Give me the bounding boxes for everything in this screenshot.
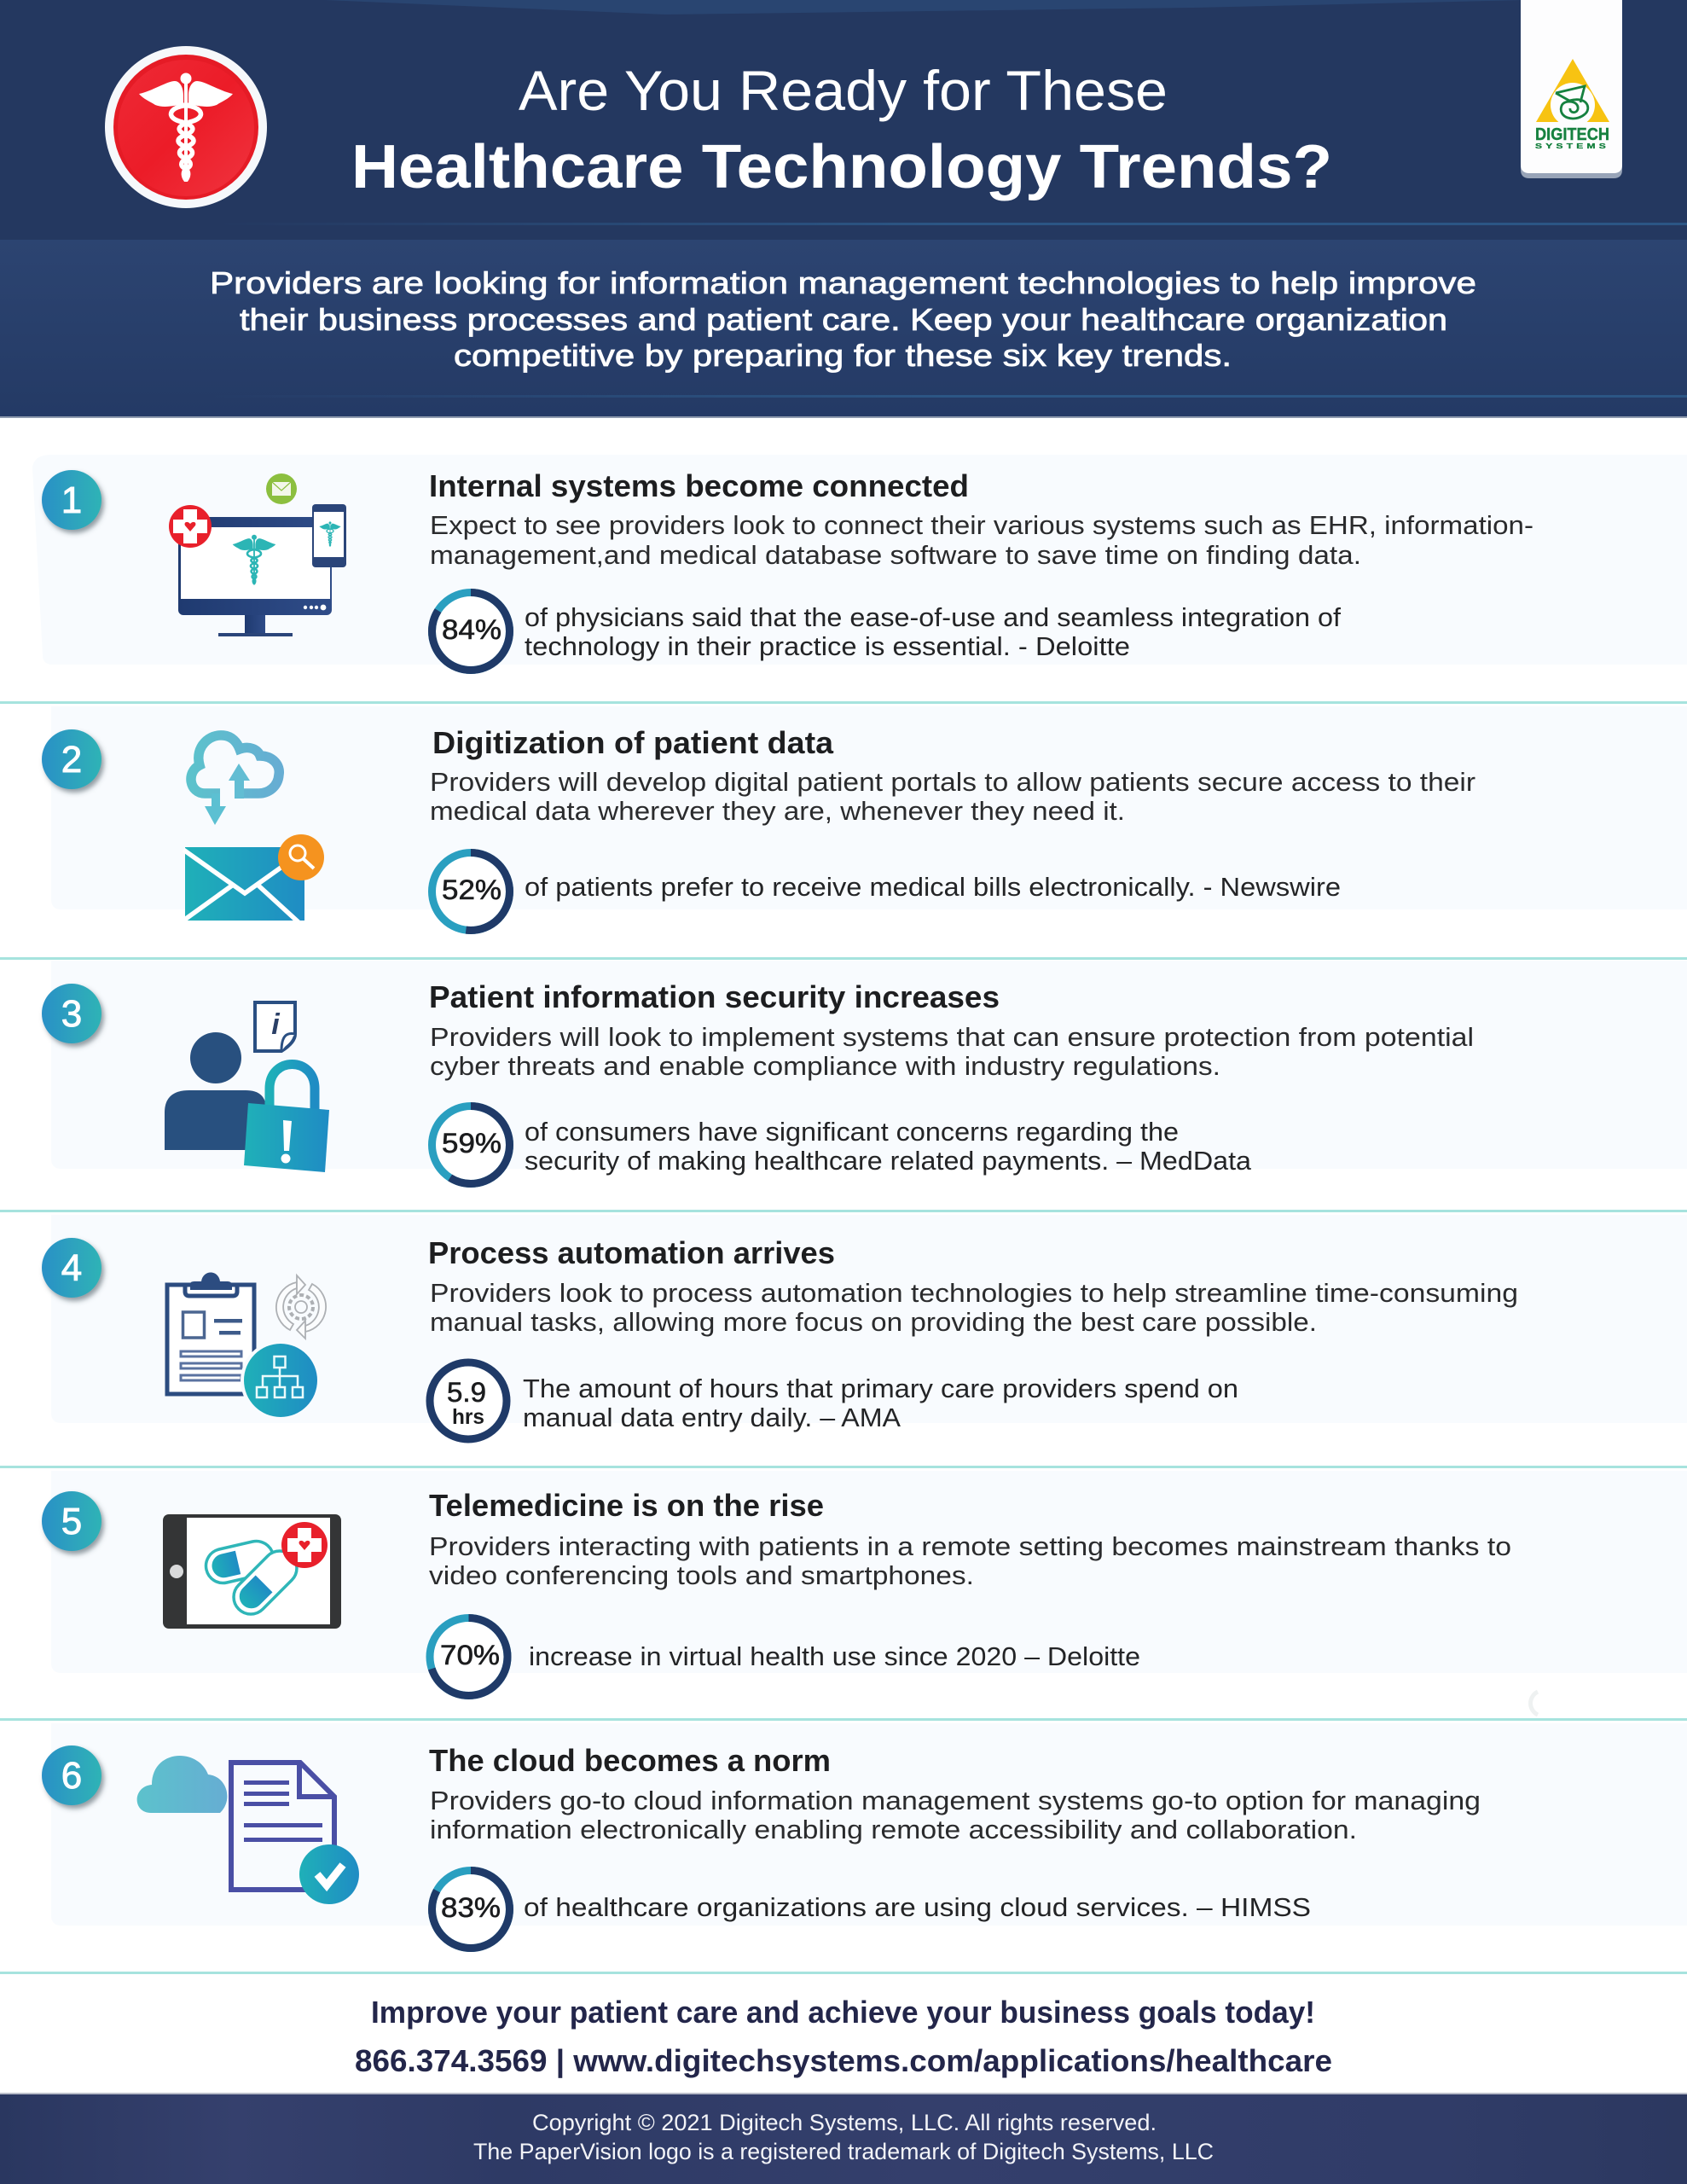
heading: Process automation arrives xyxy=(428,1235,835,1270)
heading: The cloud becomes a norm xyxy=(429,1743,831,1778)
heading: Digitization of patient data xyxy=(432,725,834,760)
panel background xyxy=(32,455,1687,665)
body text xyxy=(430,1278,1518,1337)
icon: monitor with phone xyxy=(169,473,346,636)
number badge 4: 4 xyxy=(61,1247,82,1289)
body text xyxy=(430,1786,1481,1844)
body text: Providers look to process automation technologies to help streamline time-consuming xyxy=(430,1278,1518,1308)
stat text: increase in virtual health use since 2020 – Deloitte xyxy=(529,1641,1140,1671)
body text xyxy=(429,1531,1511,1590)
body text: management,and medical database software to save time on finding data. xyxy=(430,540,1361,570)
header banner xyxy=(0,0,1687,418)
number badge 5 xyxy=(42,1491,101,1551)
ring stat 5.9 hrs xyxy=(430,1362,507,1439)
ring stat 59%: 59% xyxy=(442,1128,501,1159)
copyright text: The PaperVision logo is a registered trademark of Digitech Systems, LLC xyxy=(473,2139,1214,2164)
body text: information electronically enabling remote accessibility and collaboration. xyxy=(430,1815,1357,1844)
stat text: security of making healthcare related payments. – MedData xyxy=(525,1146,1252,1176)
copyright text: Copyright © 2021 Digitech Systems, LLC. All rights reserved. xyxy=(532,2110,1157,2135)
section 1: internal systems xyxy=(32,455,1687,671)
stat text: manual data entry daily. – AMA xyxy=(523,1403,901,1432)
call to action: 866.374.3569 | www.digitechsystems.com/applications/healthcare xyxy=(355,2043,1332,2079)
stat text: of healthcare organizations are using cloud services. – HIMSS xyxy=(524,1892,1311,1922)
body text xyxy=(430,1022,1474,1081)
section 3: security xyxy=(42,961,1687,1184)
ring stat 52%: 52% xyxy=(442,874,501,905)
call to action: Improve your patient care and achieve your business goals today! xyxy=(371,1995,1315,2030)
icon: cloud and document check xyxy=(137,1756,359,1904)
logo: Digitech Systems tab xyxy=(1521,0,1622,178)
body text: Providers go-to cloud information management systems go-to option for managing xyxy=(430,1786,1481,1815)
section 6: cloud xyxy=(42,1723,1687,1949)
ring stat 59% xyxy=(432,1106,510,1184)
body text: manual tasks, allowing more focus on providing the best care possible. xyxy=(430,1307,1317,1337)
ring stat 83% xyxy=(432,1870,510,1949)
ring stat 52% xyxy=(432,853,510,930)
intro text xyxy=(210,265,1476,373)
number badge 6: 6 xyxy=(61,1755,82,1797)
ring stat 70%: 70% xyxy=(440,1640,500,1670)
logo: Digitech Systems tab: SYSTEMS xyxy=(1535,142,1609,150)
footer xyxy=(0,2093,1687,2184)
intro text: competitive by preparing for these six key trends. xyxy=(454,338,1232,373)
icon: person, note and padlock xyxy=(165,1002,329,1172)
ring stat 5.9 hrs: 5.9 xyxy=(447,1377,486,1408)
body text: medical data wherever they are, whenever they need it. xyxy=(430,796,1125,826)
number badge 2: 2 xyxy=(61,739,82,781)
body text: cyber threats and enable compliance with industry regulations. xyxy=(430,1051,1220,1081)
body text: Expect to see providers look to connect their various systems such as EHR, information- xyxy=(430,510,1533,540)
body text: video conferencing tools and smartphones. xyxy=(429,1560,974,1590)
number badge 3 xyxy=(42,984,101,1043)
title line 1: Are You Ready for These xyxy=(519,59,1168,122)
heading: Telemedicine is on the rise xyxy=(429,1488,824,1523)
body text: Providers will develop digital patient portals to allow patients secure access to their xyxy=(430,767,1475,797)
body text: Providers will look to implement systems that can ensure protection from potential xyxy=(430,1022,1474,1052)
icon: clipboard, gear and org chart xyxy=(167,1273,326,1420)
stat text: technology in their practice is essential. - Deloitte xyxy=(525,631,1130,661)
number badge 6 xyxy=(42,1745,101,1805)
number badge 1 xyxy=(42,470,101,530)
ring stat 5.9 hrs: hrs xyxy=(452,1405,484,1429)
section 4: automation xyxy=(42,1215,1687,1439)
number badge 1: 1 xyxy=(61,479,82,521)
section 2: digitization xyxy=(42,706,1687,930)
panel background xyxy=(51,1471,1687,1673)
body text xyxy=(430,510,1533,570)
intro text: Providers are looking for information management technologies to help improve xyxy=(210,265,1476,300)
call to action xyxy=(355,1995,1332,2079)
panel background xyxy=(51,1215,1687,1423)
logo: Digitech Systems tab: DIGITECH xyxy=(1535,125,1609,144)
stat text: of patients prefer to receive medical bills electronically. - Newswire xyxy=(525,872,1341,902)
stat text: of physicians said that the ease-of-use and seamless integration of xyxy=(525,602,1341,632)
number badge 3: 3 xyxy=(61,993,82,1035)
ring stat 84% xyxy=(432,592,510,671)
intro text: their business processes and patient care. Keep your healthcare organization xyxy=(240,302,1447,337)
body text: Providers interacting with patients in a remote setting becomes mainstream thanks to xyxy=(429,1531,1511,1561)
panel background xyxy=(51,1723,1687,1926)
icon: cloud transfer and envelope xyxy=(183,735,324,922)
icon: caduceus badge xyxy=(105,46,267,208)
stat text xyxy=(523,1374,1238,1432)
panel background xyxy=(51,706,1687,909)
icon: tablet with capsules xyxy=(163,1514,341,1629)
number badge 5: 5 xyxy=(61,1501,82,1542)
heading: Patient information security increases xyxy=(429,979,1000,1014)
copyright text xyxy=(473,2110,1214,2164)
stat text: The amount of hours that primary care providers spend on xyxy=(523,1374,1238,1403)
ring stat 84%: 84% xyxy=(442,614,501,645)
heading: Internal systems become connected xyxy=(429,468,969,503)
number badge 4 xyxy=(42,1238,101,1298)
stat text xyxy=(525,602,1341,661)
ring stat 83%: 83% xyxy=(441,1892,501,1923)
ring stat 70% xyxy=(430,1618,507,1696)
icon: person, note and padlock: i xyxy=(271,1008,281,1041)
body text xyxy=(430,767,1475,826)
number badge 2 xyxy=(42,729,101,789)
panel background xyxy=(51,961,1687,1169)
section 5: telemedicine xyxy=(42,1471,1687,1715)
stat text xyxy=(525,1117,1252,1176)
stat text: of consumers have significant concerns regarding the xyxy=(525,1117,1179,1147)
title line 2: Healthcare Technology Trends? xyxy=(351,133,1332,201)
